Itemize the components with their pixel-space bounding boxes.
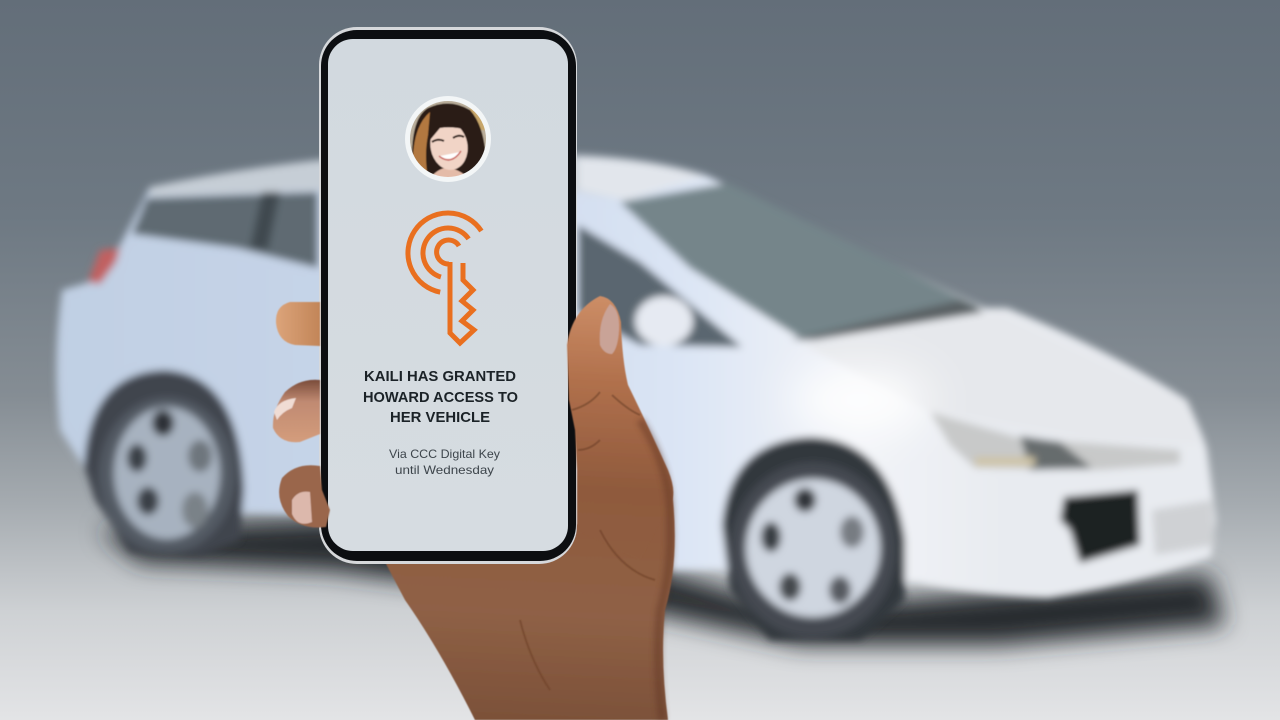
heading: HOWARD ACCESS TO	[363, 389, 518, 406]
car headlight	[930, 412, 1180, 470]
phone screen	[328, 39, 568, 551]
palm creases	[520, 392, 655, 690]
car windscreen	[620, 183, 980, 340]
hand in front	[273, 296, 673, 690]
subtext: Via CCC Digital Key	[389, 447, 500, 461]
blurred car	[56, 155, 1216, 640]
thumb nail	[600, 304, 619, 354]
hand behind phone	[385, 490, 675, 720]
rear wheel	[84, 370, 244, 556]
ring finger	[279, 465, 330, 528]
car hood	[803, 312, 1200, 445]
car mirror	[635, 296, 693, 346]
phone bezel	[321, 30, 576, 561]
subtext: until Wednesday	[395, 463, 494, 477]
heading: HER VEHICLE	[390, 409, 490, 426]
car windscreen shade	[790, 300, 985, 340]
middle finger	[273, 380, 320, 442]
car fender highlight	[790, 370, 930, 430]
car rear window	[132, 192, 318, 268]
avatar	[405, 96, 492, 182]
phone	[319, 27, 577, 564]
orange key icon	[408, 213, 481, 343]
phone frame	[319, 27, 577, 564]
front wheel	[722, 437, 905, 640]
heading: KAILI HAS GRANTED	[364, 368, 516, 385]
car grille	[1060, 490, 1140, 563]
car headlight core	[1020, 436, 1092, 470]
middle finger nail	[274, 398, 296, 420]
thumb	[567, 296, 673, 560]
car roof right	[578, 158, 705, 200]
car shadow	[100, 520, 1225, 645]
heading	[363, 368, 518, 426]
palm right edge shade	[640, 420, 670, 720]
car body	[56, 155, 1216, 598]
car fog lamp	[1152, 500, 1215, 555]
car headlight amber	[975, 457, 1035, 466]
index finger	[276, 302, 320, 346]
car rear pillar	[250, 192, 280, 250]
subtext	[389, 447, 500, 477]
ring finger nail	[292, 492, 312, 524]
car roof	[150, 155, 705, 200]
car side window	[578, 225, 742, 347]
car tail light	[88, 248, 120, 284]
